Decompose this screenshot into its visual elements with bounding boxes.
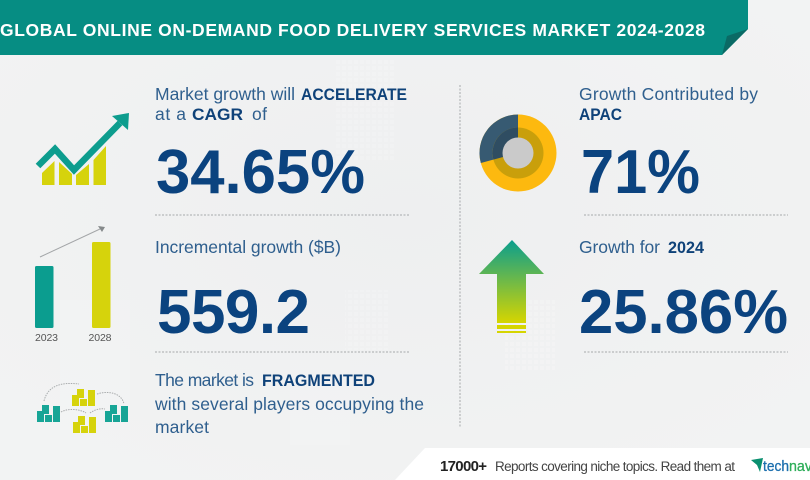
- icon: bar chart 2023 to 2028: [35, 226, 112, 344]
- text: market growth: CAGR: [192, 106, 243, 124]
- footer: call to action: Reports covering niche topics. Read them at: [495, 459, 735, 474]
- number: 2024 growth: 25.86%: [579, 278, 788, 347]
- text: market growth: [155, 84, 407, 124]
- logo: technavio: [751, 458, 810, 475]
- text: growth for 2024: Growth for: [579, 237, 660, 257]
- text: APAC growth: Growth Contributed by: [579, 84, 758, 104]
- icon: growth chart with arrow: [38, 113, 129, 185]
- text: APAC growth: APAC: [579, 106, 622, 124]
- logo: technavio: tech: [763, 458, 789, 475]
- number: APAC share: 71%: [581, 138, 700, 207]
- footer: report count: 17000+: [440, 458, 487, 475]
- icon: fragmented market buildings: [37, 383, 128, 433]
- text: growth for 2024: [579, 237, 705, 257]
- title: GLOBAL ONLINE ON-DEMAND FOOD DELIVERY SERVICES MARKET 2024-2028: [0, 20, 705, 40]
- text: fragmented market: FRAGMENTED: [262, 372, 375, 390]
- icon: up arrow: [479, 240, 544, 333]
- icon: APAC donut chart: [479, 114, 556, 192]
- title banner: [0, 0, 748, 55]
- text: fragmented market: The market is: [155, 370, 254, 390]
- text: incremental growth: Incremental growth ($B): [155, 237, 341, 257]
- text: fragmented market: [154, 370, 424, 437]
- footer strip: [395, 448, 810, 480]
- text: market growth: Market growth will: [155, 84, 295, 104]
- text: market growth: at a: [155, 104, 186, 124]
- number: CAGR: 34.65%: [156, 138, 365, 207]
- text: fragmented market: with several players occupying the: [154, 394, 424, 414]
- number: incremental growth: 559.2: [157, 278, 310, 347]
- text: fragmented market: market: [155, 417, 209, 437]
- text: market growth: ACCELERATE: [301, 86, 407, 104]
- icon: bar chart 2023 to 2028: 2028: [88, 332, 112, 344]
- text: market growth: of: [252, 104, 267, 124]
- icon: bar chart 2023 to 2028: 2023: [35, 332, 58, 344]
- text: APAC growth: [579, 84, 758, 124]
- text: growth for 2024: 2024: [668, 239, 705, 257]
